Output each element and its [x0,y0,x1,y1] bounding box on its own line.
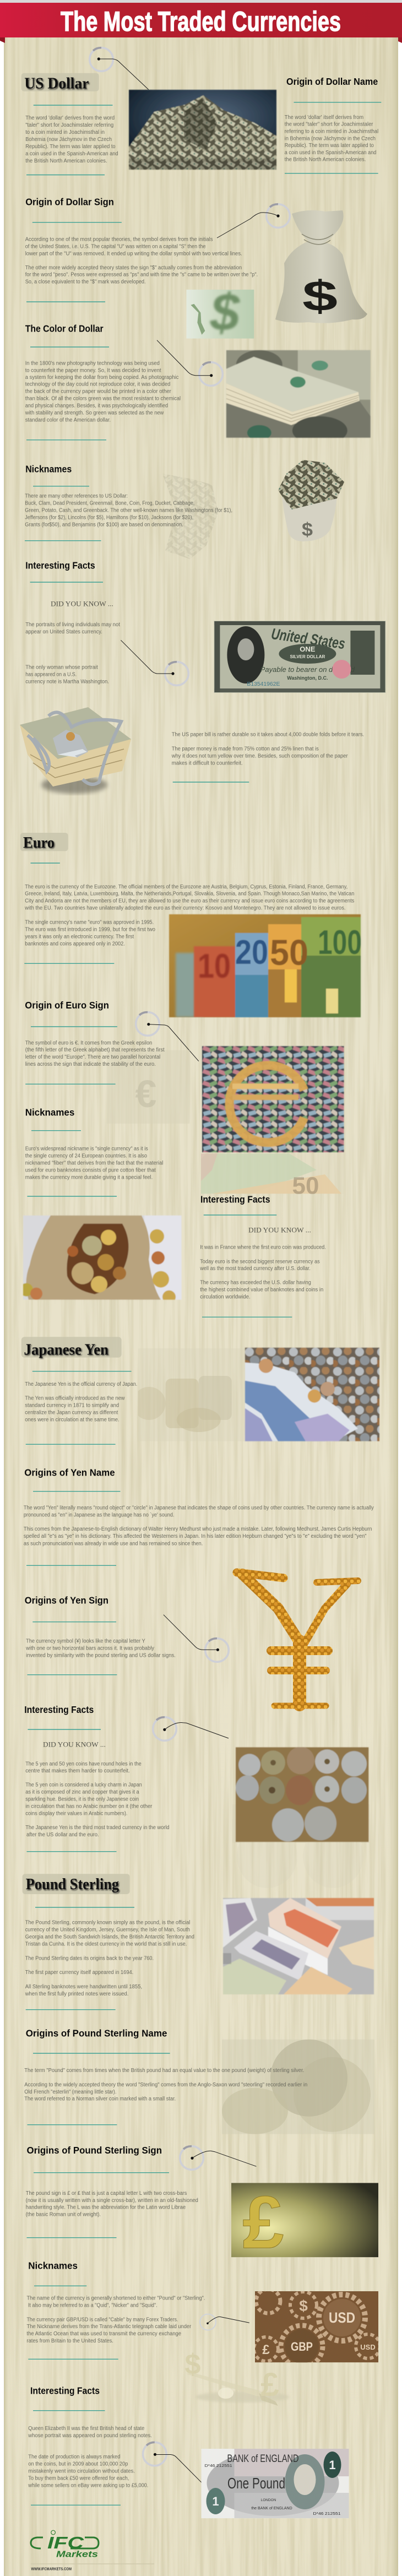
text: euro nicknames: the single currency of 24 European countries. It is also [25,1153,147,1159]
divider line [204,1214,276,1216]
connector: one pound note [143,2442,202,2482]
heading badge: Japanese Yen: Japanese Yen [24,1341,108,1358]
text: pound nicknames: The name of the currency is generally shortened to either "Pound" or "Sterling". [26,2296,205,2302]
image: money bag [275,210,367,323]
text: euro sign: lines across the sign that indicate the stability of the euro. [25,1061,156,1067]
heading: Interesting Facts: Interesting Facts [24,1704,94,1715]
faded photo: euro notes fan: 50 [292,1172,319,1199]
text: pound sign [26,2190,198,2218]
text: yen facts: in circulation that has no Arabic number on it (the other [25,1803,153,1809]
image: bank of england one pound note: 1 [329,2458,336,2472]
text: dollar name: in Bohemia (now Jáchymov in the Czech [285,135,376,142]
text: euro facts: Today euro is the second biggest reserve currency as [200,1259,320,1265]
faded image: euro symbol: € [135,1072,156,1115]
divider line [35,1907,134,1908]
text: dollar sign: So, a close equivalent to the "$" mark was developed. [25,279,146,285]
faded photo: pound coins [222,2039,374,2134]
heading: Origin of Dollar Name: Origin of Dollar Name [286,76,378,87]
text: color of dollar: and physical changes. Besides, it was psychologically identified [25,403,168,409]
photo: bag of euro coins [20,1216,182,1304]
heading badge: Japanese Yen [21,1337,122,1359]
text: yen facts: The 5 yen coin is considered a lucky charm in Japan [25,1782,142,1788]
heading badge: US Dollar: US Dollar [24,75,89,93]
text: dollar sign: for the word "peso". Pesos were expressed as "ps" and with time the "s" came to be written over the "p". [25,272,258,278]
text: pound nicknames: The currency pair GBP/USD is called "Cable" by many Forex Traders. [26,2317,178,2323]
text: paper bill facts: The US paper bill is rather durable so it takes about 4,000 double folds before it tears. [172,732,364,738]
faded image: dollar and pound balance: $ [185,2349,201,2380]
image: bank of england one pound note: One Pound [227,2475,285,2492]
text: did you know: DID YOU KNOW ... [51,600,113,608]
text: paper bill facts: why it does not turn yellow over time. Besides, such composition of the paper [171,753,348,760]
text: dollar name: Republic). The term was later applied to [285,143,374,149]
image: one dollar silver note: Payable to bearer on demand [260,665,355,674]
divider line [26,2009,116,2010]
connector: yen sign [164,1615,229,1662]
divider line [31,1130,81,1131]
text: yen name: The word "Yen" literally means "round object" or "circle" in Japanese that indicates the shape of coins used by other countries. The currency name is actually [24,1505,374,1511]
section: Euro [20,833,362,1317]
image: one dollar silver note: SILVER DOLLAR [290,654,325,659]
text: did you know: DID YOU KNOW ... [248,1225,311,1234]
text: dollar intro: The word 'dollar' derives from the word [25,115,115,121]
text: pound nicknames: It also may be referred to as a "Quid", "Nicker" and "Squid". [28,2303,157,2309]
text: portraits fact [25,622,120,635]
text: pound name: The term "Pound" comes from times when the British pound had an equal value to the one pound (weight) of sterling silver. [24,2068,304,2074]
divider line [28,1196,117,1197]
text: euro nicknames: Euro's widespread nickname is "single currency" as it is [25,1146,148,1152]
heading: Interesting Facts: Interesting Facts [200,1194,270,1205]
text: euro nicknames: nicknamed "fiber" that derives from the fact that the material [25,1160,163,1167]
text: pound facts: Queen Elizabeth II was the first British head of state [28,2426,145,2432]
image: bag of dollars: $ [302,519,313,540]
text: dollar name: The word 'dollar' itself derives from [285,115,363,121]
connector: yen coins [153,1717,229,1740]
photo: rolled euro notes: 50 [270,932,308,973]
divider line [34,2172,169,2173]
text: euro name history: The euro was first introduced in 1999, but for the first two [25,926,155,932]
text: euro facts: The currency has exceeded the U.S. dollar having [200,1280,311,1286]
text: pound nicknames [26,2296,205,2344]
photo: dollar symbol shadow [186,283,254,342]
divider line [28,2124,117,2125]
text: euro intro: City and Andorra are not the members of EU, they are allowed to use the euro as their currency and issue euro coins according to the agreements [25,898,354,904]
photo: rolled euro notes: 20 [235,934,268,972]
footer url: WWW.IFCMARKETS.COM [31,2566,72,2571]
text: dollar intro: to a coin minted in Joachimsthal in [25,129,105,135]
heading badge: Euro: Euro [24,835,55,853]
text: yen name [24,1505,374,1547]
text: pound intro: The Pound Sterling, commonly known simply as the pound, is the official [25,1920,190,1926]
text: euro facts: the highest combined value of banknotes and coins in [200,1287,323,1293]
text: pound sign: The pound sign is £ or ₤ that is just a capital letter L with two cross-bars [26,2190,187,2197]
text: paper bill facts: makes it difficult to counterfeit. [172,761,243,767]
photo: currency gears: GBP [291,2340,313,2353]
faded photo: euro notes fan [201,1153,341,1199]
divider line [25,1083,116,1084]
text: euro intro [24,884,354,912]
faded photo: coin reflection [232,1804,370,1888]
photo: golden pound sign [231,2181,378,2264]
text: euro sign: letter of the word "Europe". There are two parallel horizontal [25,1054,160,1060]
connector: color of dollar [157,340,222,386]
divider line [26,1444,116,1445]
heading: Nicknames: Nicknames [28,2260,78,2271]
text: yen facts: after the US dollar and the euro. [26,1832,99,1838]
text: euro sign: The symbol of euro is €. It comes from the Greek epsilon [25,1040,152,1046]
text: euro facts: It was in France where the first euro coin was produced. [200,1244,326,1250]
text: dollar sign: of the United States, i.e. U.S. The capital "U" was written on a capital "S" then the [25,243,206,250]
text: euro name history: years it was only an electronic currency. The first [25,934,134,940]
text: dollar nicknames: Buck, Clam, Dead President, Greenmail, Bone, Coin, Frog, Ducket, Cabbage, [25,501,194,507]
text: martha washington fact: currency note is Martha Washington. [25,679,109,685]
text: pound nicknames: rates from Britain to the United States. [26,2338,113,2344]
text: yen name: pronounced as "en" in Japanese as the language has no `ye' sound. [24,1511,174,1518]
text: dollar name: a coin used in the Spanish-American and [285,150,376,156]
divider line [31,2504,121,2506]
photo: currency gears: $ [299,2297,308,2314]
text: portraits fact: appear on United States currency. [25,629,102,635]
text: pound intro: The Pound Sterling dates its origins back to the year 760. [25,1955,154,1961]
text: yen intro: centralize the Japan currency as different [25,1410,118,1416]
text: yen facts: coins display their values in Arabic numbers). [25,1810,128,1816]
text: dollar sign [25,236,258,285]
text: yen sign: with one or two horizontal bars across it. It was probably [25,1646,154,1652]
text: pound sign: (the basic Roman unit of weight). [26,2212,101,2218]
text: yen facts [25,1761,170,1838]
text: dollar nicknames: Grants (for$50), and Benjamins (for $100) are based on denomination. [25,522,183,528]
divider line [25,540,101,541]
divider line [31,863,60,864]
text: yen name: spelled all "e"s as "ye" in his dictionary. This affected the Westerners in Japan. In his later edition Hepburn changed "ye"s to "e" excluding the word "yen" [24,1533,367,1539]
photo: currency gears [255,2291,378,2363]
text: euro facts: circulation worldwide. [200,1294,251,1300]
photo: rolled euro notes [169,914,362,1017]
photo: dollar symbol shadow: $ [210,283,241,342]
divider line [26,440,106,441]
text: dollar intro: Republic). The term was later applied to [25,144,116,150]
faded image: falling notes [162,474,218,559]
text: yen facts: as it is composed of zinc and copper that gives it a [25,1789,139,1795]
text: color of dollar: standard color of the American dollar. [25,417,111,424]
text: dollar sign: lower part of the "U" was removed. It ended up writing the dollar symbol with two vertical lines. [25,251,242,257]
logo: IFC Markets: IFC [47,2533,84,2552]
image: yen sign made of gold coins [237,1572,358,1706]
photo: currency gears: USD [360,2343,376,2351]
text: pound name [24,2068,307,2102]
text: euro facts: well as the most traded currency after U.S. dollar. [199,1266,311,1272]
text: pound facts [28,2426,152,2488]
divider line [33,2410,105,2411]
text: color of dollar: technology of the day could not reproduce color, it was decided [25,382,170,388]
heading: Nicknames: Nicknames [25,464,72,475]
text: pound name: According to the widely accepted theory the word "Sterling" comes from the Anglo-Saxon word "steorling" recorded earlier in [24,2082,307,2088]
text: dollar nicknames: Jeffersons (for $2), Lincolns (for $5), Hamiltons (for $10), Jacksons (for $20), [25,514,193,520]
text: euro sign: (the fifth letter of the Greek alphabet) that represents the first [25,1047,165,1053]
heading: Interesting Facts: Interesting Facts [30,2385,100,2396]
connector: pound sign [180,2146,256,2170]
text: euro intro: with the EU. Two countries have unilaterally adopted the euro as their currency: Kosovo and Montenegro. They are not allowed to issue euros. [24,905,345,912]
text: yen facts: The Japanese Yen is the third most traded currency in the world [25,1825,170,1831]
text: pound sign: (now it is usually written with a single cross-bar), written in an old-fashioned [26,2198,198,2204]
logo: IFC Markets: Markets [56,2550,98,2559]
text: pound facts: To buy them back £50 were offered for each, [28,2476,129,2482]
image: money bag: $ [302,272,338,320]
text: color of dollar: In the 1800's new photography technology was being used [25,360,160,366]
text: euro nicknames: makes the currency more durable giving it a special feel. [25,1174,153,1180]
text: dollar name [285,115,378,163]
divider line [28,1674,117,1675]
text: dollar sign: According to one of the most popular theories, the symbol derives from the initials [25,236,213,242]
text: euro intro: The euro is the currency of the Eurozone. The official members of the Eurozone are Austria, Belgium, Cyprus, Estonia, Finland, France, Germany, [25,884,347,890]
heading: Nicknames: Nicknames [25,1107,75,1118]
text: did you know: DID YOU KNOW ... [43,1740,106,1748]
text: paper bill facts [171,732,364,767]
text: euro facts [199,1244,326,1300]
text: yen facts: The 5 yen and 50 yen coins have round holes in the [25,1761,142,1767]
heading badge: Pound Sterling: Pound Sterling [26,1876,119,1893]
title banner [0,0,402,43]
photo: stack of 100 dollar bills [226,350,371,445]
divider line [202,1316,292,1317]
text: pound nicknames: The Nickname derives from the Trans-Atlantic telegraph cable laid under [26,2324,192,2330]
heading: Origins of Pound Sterling Sign: Origins of Pound Sterling Sign [26,2145,162,2156]
text: dollar intro: a coin used in the Spanish-American and [25,151,118,157]
photo: currency gears: USD [329,2309,355,2326]
image: bank of england one pound note: D*46 212551 [205,2464,232,2468]
divider lines [26,102,381,175]
text: paper bill facts: The paper money is made from 75% cotton and 25% linen that is [172,746,319,752]
heading badge: Japanese Yen: Japanese Yen [25,1342,110,1359]
image: bank of england one pound note: BANK of ENGLAND [227,2453,298,2465]
divider line [28,1729,101,1730]
heading: Origins of Yen Sign: Origins of Yen Sign [25,1595,108,1606]
photo: stacks of pound notes [223,1898,374,1994]
text: euro nicknames: used for euro banknotes consists of pure cotton fiber that [25,1167,156,1173]
divider line [33,1491,120,1492]
divider line [30,582,103,583]
text: martha washington fact: The only woman whose portrait [25,665,98,671]
text: yen sign [25,1639,176,1659]
text: pound name: The word referred to a Norman silver coin marked with a small star. [24,2096,176,2102]
text: euro name history [25,919,155,947]
heading: Origins of Pound Sterling Name: Origins of Pound Sterling Name [26,2027,167,2038]
image: bank of england one pound note: LONDON [261,2498,276,2502]
divider line [33,2053,170,2054]
text: dollar nicknames: Green, Potato, Cash, and Greenback. The other well-known names like Washingtons (for $1), [25,508,232,514]
text: yen name: as such pronunciation was already in wide use and has remained so since then. [24,1541,203,1547]
text: yen facts: sparkling hue. Besides, it is the only Japanese coin [25,1796,139,1802]
text: pound name: Old French "esterlin" (meaning little star). [24,2089,116,2095]
text: pound intro [25,1920,194,1997]
image: one dollar silver note: United States [270,625,346,652]
footer rule [31,2563,154,2564]
divider line [32,1371,131,1372]
logo: IFC Markets [31,2530,99,2559]
text: pound intro: Tristan da Cunha. It is the oldest currency in the world that is still in use. [25,1941,187,1947]
faded photo: yen notes and coins [138,1376,232,1432]
text: color of dollar [25,360,181,424]
section: Pound Sterling [23,1874,380,2571]
image: bank of england one pound note [202,2449,349,2518]
text: dollar intro: the British North American colonies. [25,158,107,164]
divider line [24,963,114,964]
heading: Origins of Yen Name: Origins of Yen Name [24,1467,115,1478]
heading: Origin of Euro Sign: Origin of Euro Sign [25,1000,109,1011]
image: bank of england one pound note: the BANK of ENGLAND [251,2507,292,2510]
divider line [26,1851,117,1852]
photo: yen coins on wood [236,1747,368,1842]
text: yen intro: The Japanese Yen is the official currency of Japan. [25,1381,137,1387]
image: one dollar silver note: ONE [300,645,316,653]
text: dollar intro: "taler" short for Joachimstaler referring [25,122,113,128]
photo: pile of dollars [129,90,276,170]
heading badge: Pound Sterling: Pound Sterling [26,1877,120,1894]
divider line [173,782,249,783]
text: pound facts: The date of production is always marked [28,2454,120,2460]
text: yen intro: ones were in circulation at the same time. [25,1417,119,1423]
text: euro sign [25,1040,165,1067]
text: color of dollar: with stability and strength. So green was selected as the new [25,410,164,416]
faded image: dollar and pound balance: £ [260,2366,279,2403]
section: US Dollar [20,48,385,794]
text: pound intro: The first paper currency itself appeared in 1694. [25,1970,133,1976]
divider line [26,1565,116,1566]
text: color of dollar: than black. Of all the colors green was the most resistant to chemical [25,396,181,402]
image: one dollar silver note [214,621,385,693]
text: pound intro: Georgia and the South Sandwich Islands, the British Antarctic Territory and [25,1934,194,1940]
text: euro name history: banknotes and coins appeared only in 2002. [25,941,125,947]
text: dollar name: the British North American colonies. [285,157,366,163]
connector: silver dollar [121,640,188,685]
divider line [32,1621,116,1623]
text: martha washington fact: has appeared on a U.S. [25,671,77,677]
image: bank of england one pound note: 1 [212,2494,219,2508]
text: dollar intro: Bohemia (now Jáchymov in the Czech [25,137,112,143]
section: Japanese Yen [21,1337,379,1888]
text: yen name: This comes from the Japanese-to-English dictionary of Walter Henry Medhurst who just made a mistake. Later, following Medhurst, James Curtis Hepburn [24,1526,372,1532]
text: yen intro: The Yen was officially introduced as the new [25,1396,125,1402]
text: color of dollar: a system for keeping the dollar from being copied. As photographic [25,375,178,381]
image: one dollar silver note: B13541962E [247,681,280,687]
photo: rolled euro notes: 10 [198,947,231,985]
text: yen facts: centre that makes them harder to counterfeit. [25,1768,130,1774]
photo: yen notes and coins [245,1348,379,1441]
faded image: dollar and pound balance [185,2349,289,2406]
text: yen sign: invented by similarity with the pound sterling and US dollar signs. [26,1653,176,1659]
text: euro name history: The single currency's name "euro" was approved in 1995. [25,919,154,925]
text: pound facts: whose portrait was appeared on pound sterling notes. [28,2433,152,2439]
text: euro nicknames [25,1146,163,1180]
image: bank of england one pound note: D*46 212551 [313,2512,341,2516]
text: yen intro: standard currency in 1871 to simplify and [25,1403,119,1409]
connector: dollar sign [217,204,290,238]
text: color of dollar: the back of the currency paper would be printed in a color other [25,389,171,395]
text: portraits fact: The portraits of living individuals may not [25,622,120,628]
photo: golden pound sign: £ [242,2181,284,2264]
image: bag of dollars [278,460,344,541]
text: pound facts: while some sellers on eBay were asking up to £5,000. [28,2482,148,2488]
heading badge: Euro [20,833,68,853]
heading: Origin of Dollar Sign: Origin of Dollar Sign [25,197,114,208]
text: yen intro [25,1381,137,1423]
photo: euro sign on notes [202,1046,344,1152]
text: dollar nicknames: There are many other references to US Dollar: [25,493,128,500]
faded image: euro symbol [107,1050,189,1124]
text: pound sign: handwriting style. The L was the abbreviation for the Latin word Librae [26,2205,186,2211]
image: chained stack of bills [20,707,131,794]
text: dollar name: referring to a coin minted in Joachimsthal [285,129,378,135]
divider line [30,346,109,348]
divider line [26,301,105,302]
text: dollar nicknames [25,493,232,528]
connector: euro sign [136,1012,199,1061]
photo: currency gears: £ [262,2342,270,2357]
divider line [33,486,89,487]
divider line [34,2285,86,2286]
divider line [32,222,122,223]
text: pound facts: on the coins, but in 2009 about 100,000 20p [28,2461,128,2467]
divider line [26,2237,117,2238]
text: pound facts: mistakenly went into circulation without dates. [28,2469,135,2475]
connector: gears [200,2314,249,2330]
text: martha washington fact [25,665,109,685]
connector: dollar name [90,48,149,90]
image: one dollar silver note: Washington, D.C. [287,675,328,681]
text: pound intro: currency of the United Kingdom, Jersey, Guernsey, the Isle of Man, South [25,1927,190,1933]
text: color of dollar: to counterfeit the paper money. So, It was decided to invent [25,367,161,373]
text: yen sign: The currency symbol (¥) looks like the capital letter Y [26,1639,145,1645]
heading badge: US Dollar: US Dollar [25,76,90,94]
heading: The Color of Dollar: The Color of Dollar [25,323,104,334]
heading badge: Euro: Euro [23,834,55,852]
text: pound intro: when the first fully printed notes were issued. [25,1991,128,1997]
divider line [28,2358,118,2360]
heading: Interesting Facts: Interesting Facts [25,560,95,571]
text: dollar sign: The other more widely accepted theory states the sign "$" actually comes from the abbreviation [25,265,242,271]
text: dollar intro [25,115,118,164]
divider line [31,1026,117,1027]
text: pound intro: All Sterling banknotes were handwritten until 1855, [25,1984,142,1990]
text: euro intro: Greece, Ireland, Italy, Latvia, Luxembourg, Malta, the Netherlands,Portugal, Slovakia, Slovenia, and Spain. Though Monaco,San Marino, the Vatican [25,891,354,897]
text: dollar name: the word "taler" short for Joachimstaler [285,122,373,128]
text: pound nicknames: the Atlantic Ocean that was used to transmit the currency exchange [26,2331,181,2337]
